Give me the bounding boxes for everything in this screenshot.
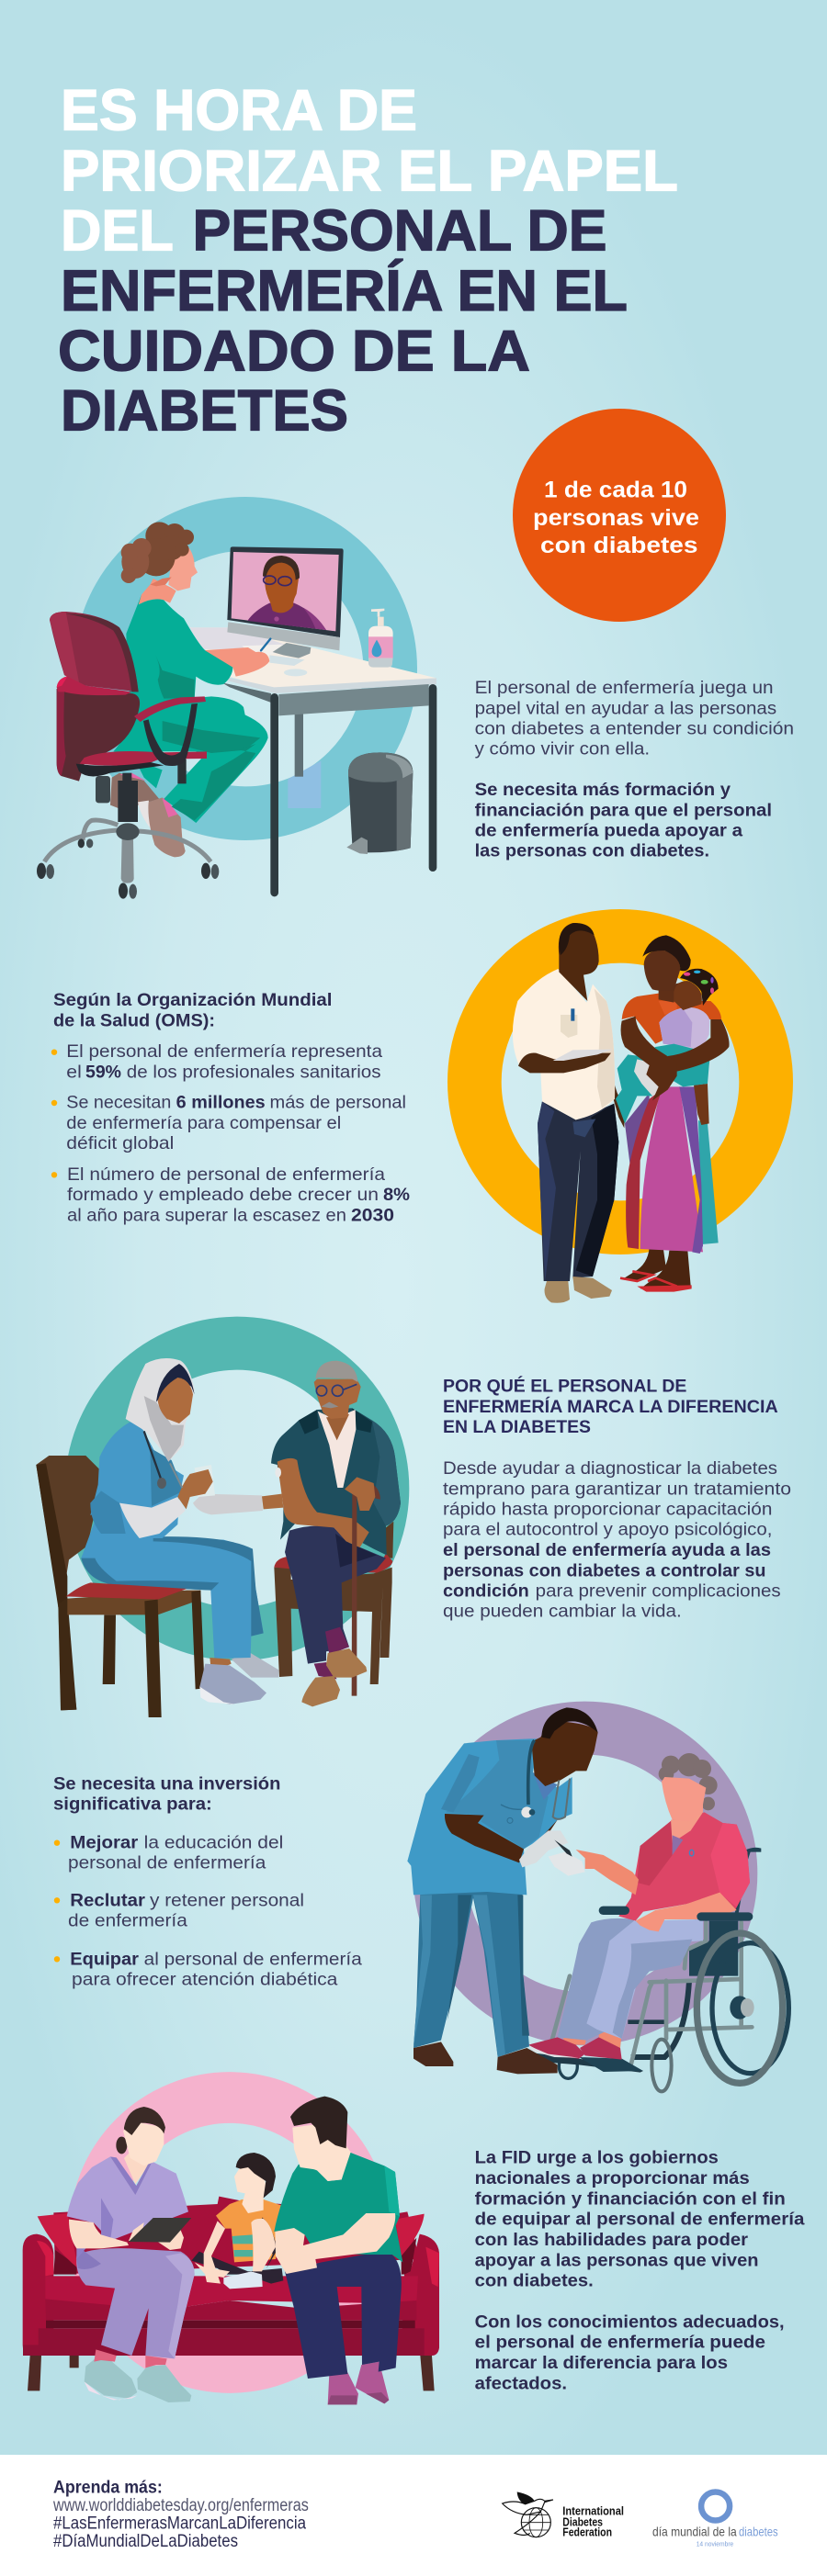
illustration: nurse with mother and child	[474, 923, 766, 1303]
text block: intro: con diabetes a entender su condición	[475, 718, 794, 738]
text block: FID call to action: nacionales a proporcionar más	[475, 2168, 750, 2188]
title: DIABETES	[61, 379, 348, 444]
monitor with doctor on screen	[227, 546, 344, 658]
text block: por qué: condición	[443, 1581, 529, 1602]
nurse chair	[36, 1456, 205, 1710]
text block: FID call to action: formación y financiación con el fin	[475, 2188, 786, 2209]
logo: International Diabetes Federation: Diabetes	[562, 2516, 603, 2529]
text block: OMS facts: de los profesionales sanitarios	[127, 1062, 381, 1082]
logo: día mundial de la diabetes: diabetes	[739, 2525, 778, 2539]
text block: FID call to action	[475, 2147, 805, 2393]
text block: intro: financiación para que el personal	[475, 800, 772, 820]
text block: FID call to action: con diabetes.	[475, 2270, 594, 2290]
nurse in blue scrubs	[407, 1707, 598, 2074]
text block: OMS facts: El número de personal de enfermería	[67, 1164, 385, 1185]
text block: inversión: y retener personal	[150, 1891, 304, 1911]
nurse in lavender scrubs	[67, 2107, 195, 2402]
icon: waste bin	[346, 752, 413, 854]
title: ES HORA DE	[61, 79, 417, 143]
title	[58, 79, 678, 444]
text block: inversión: al personal de enfermería	[144, 1949, 362, 1969]
callout: 1 de cada 10: con diabetes	[540, 533, 698, 558]
text block: por qué	[443, 1376, 791, 1622]
icon: sanitizer bottle	[368, 609, 393, 668]
text block: por qué: rápido hasta proporcionar capacitación	[443, 1500, 772, 1520]
text block: FID call to action: Con los conocimientos adecuados,	[475, 2312, 785, 2333]
title: CUIDADO DE LA	[58, 319, 530, 383]
patient chair	[274, 1522, 393, 1684]
illustration: nurse in hijab with elderly patient	[36, 1344, 401, 1717]
footer links: www.worlddiabetesday.org/enfermeras	[52, 2496, 309, 2515]
logo: día mundial de la diabetes: 14 noviembre	[697, 2539, 733, 2548]
footer panel	[0, 2455, 827, 2576]
text block: por qué: EN LA DIABETES	[443, 1417, 591, 1437]
text block: intro: papel vital en ayudar a las personas	[475, 698, 776, 718]
text block: OMS facts: de la Salud (OMS):	[53, 1010, 215, 1030]
desk	[190, 627, 436, 896]
text block: OMS facts: El personal de enfermería representa	[66, 1041, 382, 1062]
text block: inversión: Mejorar	[70, 1832, 139, 1852]
nurse in hijab	[66, 1358, 283, 1717]
seated woman	[528, 1753, 753, 2060]
illustration: nurse with family on sofa	[23, 2097, 439, 2404]
text block: intro: El personal de enfermería juega un	[475, 678, 774, 698]
text block: OMS facts: el	[66, 1062, 82, 1082]
text block: FID call to action: el personal de enfermería puede	[475, 2333, 765, 2353]
text block: inversión: para ofrecer atención diabética	[72, 1969, 338, 1989]
text block: OMS facts: Se necesitan	[66, 1093, 171, 1113]
callout: 1 de cada 10: 1 de cada 10	[544, 478, 687, 503]
nurse figure	[110, 522, 270, 857]
text block: por qué: para el autocontrol y apoyo psicológico,	[443, 1520, 772, 1540]
text block: inversión: significativa para:	[53, 1794, 212, 1815]
text block: OMS facts: formado y empleado debe crecer un	[67, 1185, 379, 1205]
text block: OMS facts: de enfermería para compensar el	[66, 1113, 341, 1133]
text block: inversión	[53, 1773, 362, 1989]
logo: International Diabetes Federation	[503, 2492, 624, 2538]
text block: inversión: la educación del	[144, 1832, 283, 1852]
text block: intro: Se necesita más formación y	[475, 780, 731, 800]
illustration: nurse at desk on video call	[37, 522, 436, 899]
sofa	[23, 2197, 439, 2390]
text block: OMS facts	[51, 990, 410, 1225]
father	[274, 2097, 402, 2404]
footer links: Aprenda más:	[53, 2478, 163, 2497]
text block: FID call to action: marcar la diferencia para los	[475, 2353, 728, 2373]
text block: FID call to action: con las habilidades para poder	[475, 2230, 748, 2250]
text block: OMS facts: déficit global	[66, 1133, 174, 1153]
text block: por qué: ENFERMERÍA MARCA LA DIFERENCIA	[443, 1396, 778, 1417]
text block: intro: de enfermería pueda apoyar a	[475, 821, 742, 841]
logo: International Diabetes Federation: Federation	[562, 2525, 612, 2538]
text block: por qué: personas con diabetes a controlar su	[443, 1560, 766, 1580]
text block: FID call to action: La FID urge a los gobiernos	[475, 2147, 719, 2167]
child	[191, 2153, 283, 2289]
elderly patient	[271, 1361, 401, 1706]
title: ENFERMERÍA EN EL	[61, 259, 628, 323]
text block: por qué: POR QUÉ EL PERSONAL DE	[443, 1376, 686, 1397]
text block: inversión: de enfermería	[68, 1911, 187, 1931]
mother and child	[616, 935, 730, 1292]
callout: 1 de cada 10: personas vive	[533, 505, 699, 531]
illustration: nurse testing patient in wheelchair	[407, 1707, 788, 2091]
text block: intro: las personas con diabetes.	[475, 841, 709, 861]
logo: International Diabetes Federation: International	[562, 2504, 624, 2517]
text block: FID call to action: apoyar a las personas que viven	[475, 2250, 759, 2270]
text block: OMS facts: Según la Organización Mundial	[53, 990, 332, 1010]
text block: por qué: Desde ayudar a diagnosticar la diabetes	[443, 1458, 777, 1479]
text block: por qué: temprano para garantizar un tratamiento	[443, 1479, 791, 1499]
text block: inversión: Equipar	[70, 1949, 139, 1969]
logo: día mundial de la diabetes: día mundial de la	[652, 2525, 737, 2539]
title: DEL	[61, 199, 174, 264]
title: PERSONAL DE	[193, 199, 606, 264]
callout: 1 de cada 10	[513, 409, 726, 622]
text block: OMS facts: 6 millones	[176, 1093, 266, 1113]
text block: OMS facts: más de personal	[270, 1093, 406, 1113]
logo: día mundial de la diabetes	[652, 2492, 778, 2548]
wheelchair	[530, 1848, 788, 2091]
text block: OMS facts: 2030	[351, 1205, 394, 1225]
office chair	[37, 612, 219, 899]
text block: por qué: para prevenir complicaciones	[536, 1581, 781, 1602]
text block: por qué: el personal de enfermería ayuda a las	[443, 1540, 771, 1560]
text block: FID call to action: de equipar al personal de enfermería	[475, 2210, 805, 2230]
footer links: #DíaMundialDeLaDiabetes	[53, 2532, 238, 2551]
footer links	[52, 2478, 309, 2551]
text block: intro	[475, 678, 794, 861]
male nurse	[513, 923, 625, 1303]
footer links: #LasEnfermerasMarcanLaDiferencia	[53, 2514, 306, 2534]
text block: inversión: Se necesita una inversión	[53, 1773, 280, 1794]
text block: inversión: Reclutar	[70, 1891, 145, 1911]
text block: FID call to action: afectados.	[475, 2373, 567, 2393]
text block: inversión: personal de enfermería	[68, 1852, 266, 1873]
text block: intro: y cómo vivir con ella.	[475, 739, 650, 759]
text block: OMS facts: 8%	[383, 1185, 410, 1205]
title: PRIORIZAR EL PAPEL	[61, 139, 678, 203]
text block: OMS facts: 59%	[85, 1062, 121, 1082]
text block: OMS facts: al año para superar la escasez en	[67, 1205, 346, 1225]
text block: por qué: que pueden cambiar la vida.	[443, 1602, 682, 1622]
